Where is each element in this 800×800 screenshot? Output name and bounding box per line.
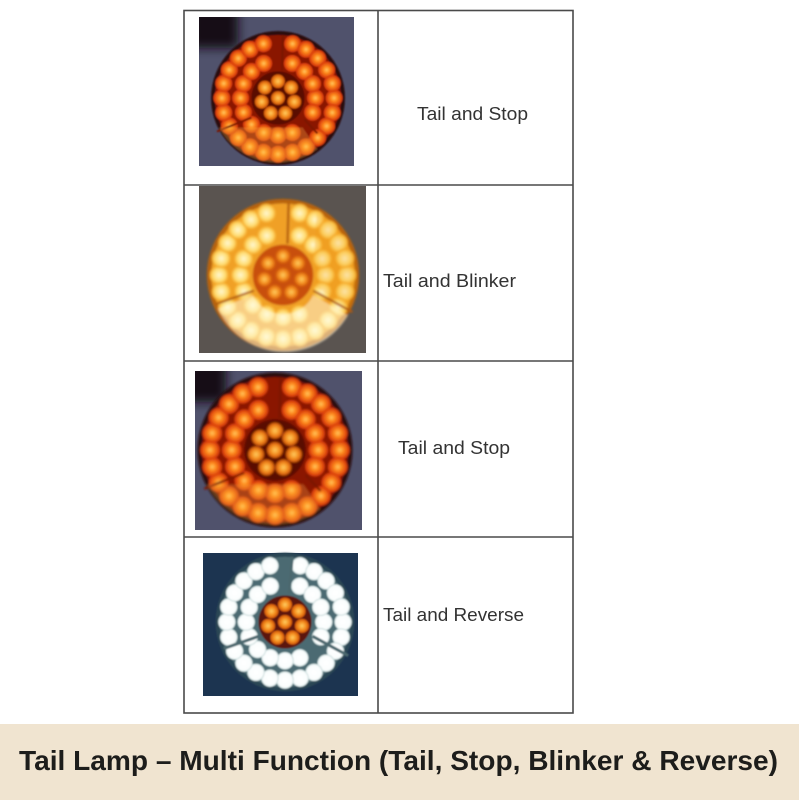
photo: tail and stop lamp, first row xyxy=(199,17,354,166)
title banner: Tail Lamp – Multi Function (Tail, Stop, Blinker & Reverse) xyxy=(19,745,778,776)
photo: tail and reverse lamp xyxy=(203,553,358,696)
table grid xyxy=(184,10,573,713)
label: tail and reverse: Tail and Reverse xyxy=(383,604,524,625)
photo: tail and stop lamp, third row xyxy=(186,362,362,530)
label: tail and stop, third row: Tail and Stop xyxy=(398,437,510,458)
title banner xyxy=(0,724,799,800)
label: tail and blinker: Tail and Blinker xyxy=(383,270,516,291)
label: tail and stop, first row: Tail and Stop xyxy=(417,103,528,124)
photo: tail and blinker lamp xyxy=(199,186,366,353)
